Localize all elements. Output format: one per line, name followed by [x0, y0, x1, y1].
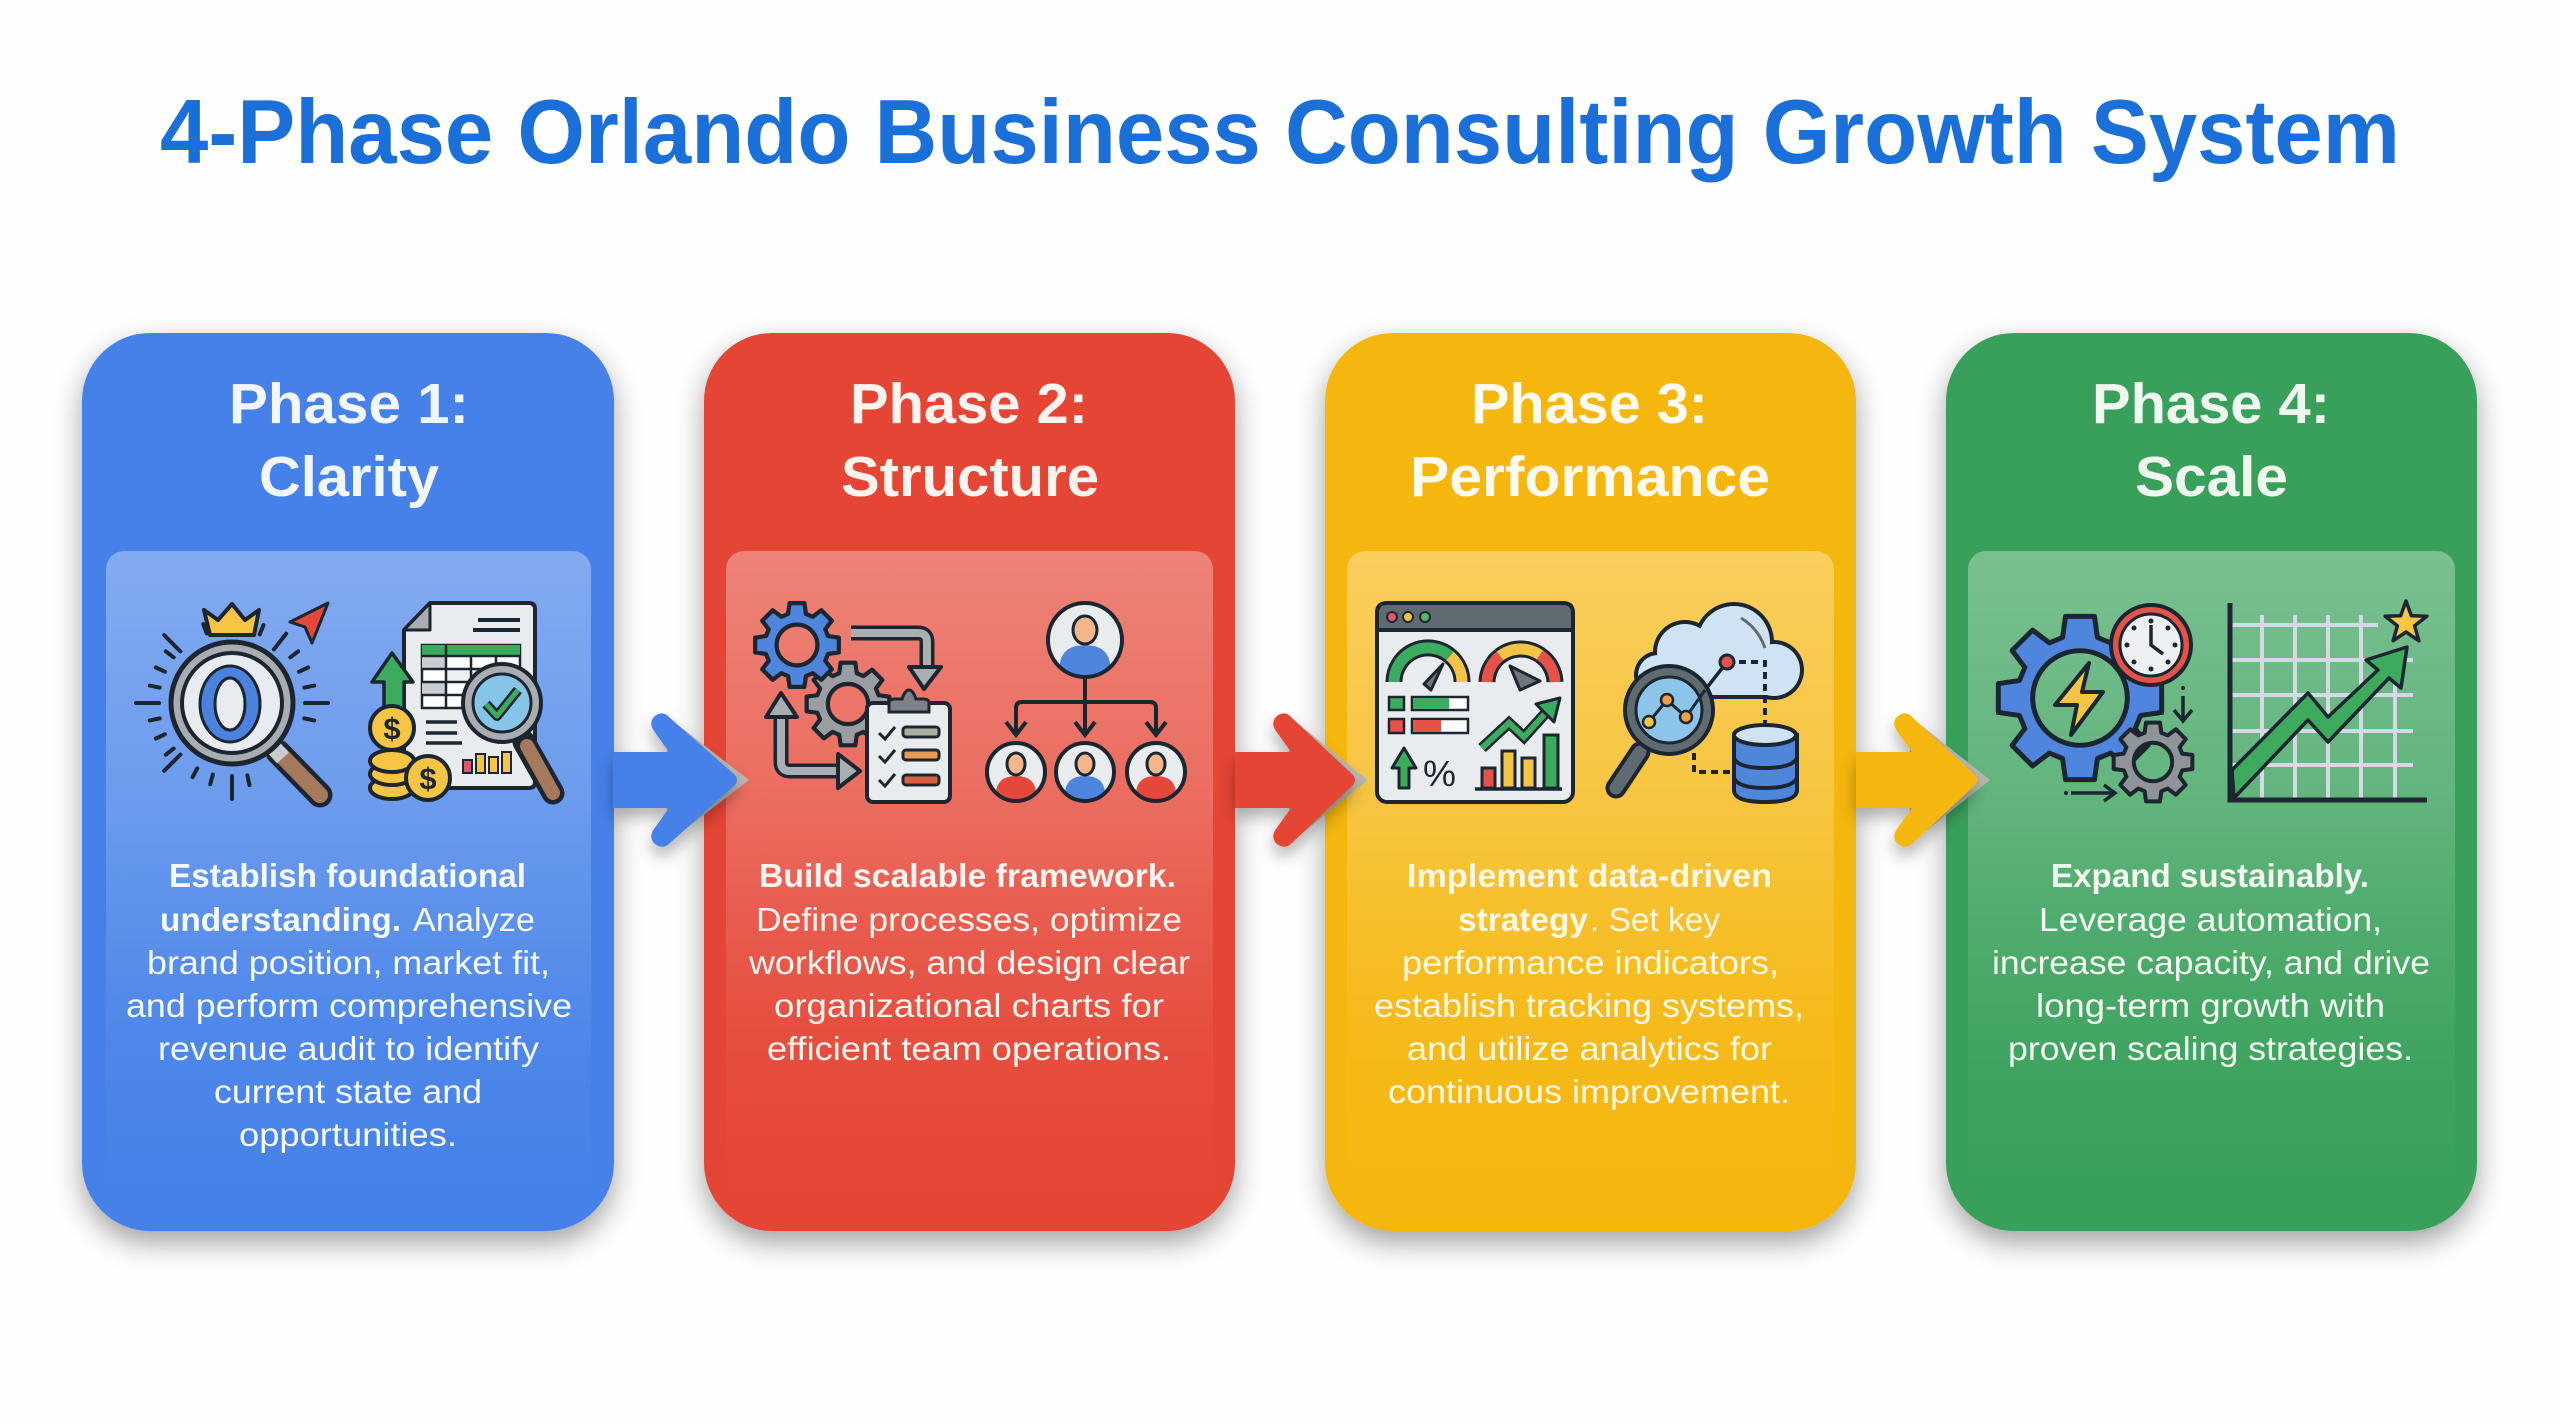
heading: phase 3	[1410, 372, 1770, 509]
text: phase 3 description: and utilize analytics for	[1407, 1031, 1772, 1068]
panel: phase 1 clarity	[82, 333, 614, 1231]
text: phase 1 description	[126, 858, 572, 1154]
text: phase 4 description	[1992, 858, 2430, 1068]
heading: phase 1: Clarity	[259, 445, 439, 509]
icon: organizational chart	[987, 603, 1185, 801]
icon: revenue audit document: $	[419, 761, 437, 796]
text: phase 4 description: Expand sustainably.	[2051, 858, 2369, 895]
text: phase 3 description: establish tracking systems,	[1374, 988, 1804, 1025]
arrow: phase 1 to phase 2	[613, 713, 749, 847]
heading: phase 3: Phase 3:	[1471, 372, 1708, 436]
arrow: phase 2 to phase 3	[1235, 713, 1368, 847]
panel: phase 2 structure	[704, 333, 1235, 1231]
text: phase 1 description: Analyze	[413, 902, 535, 939]
text: phase 2 description: efficient team operations.	[767, 1031, 1171, 1068]
text: phase 2 description: Build scalable framework.	[759, 858, 1176, 895]
text: phase 3 description	[1374, 858, 1804, 1111]
text: phase 4 description: increase capacity, and drive	[1992, 945, 2430, 982]
heading: phase 4: Phase 4:	[2092, 372, 2330, 436]
text: phase 1 description: brand position, market fit,	[147, 945, 550, 982]
icon: cloud data analysis	[1616, 602, 1804, 802]
text: phase 3 description: . Set key	[1590, 902, 1720, 939]
text: phase 1 description: revenue audit to identify	[158, 1031, 539, 1068]
text: phase 4 description: proven scaling strategies.	[2008, 1031, 2413, 1068]
icon: magnifier with brand O, crown and pointer	[136, 603, 328, 799]
text: phase 1 description: Establish foundational	[169, 858, 526, 895]
icon: analytics dashboard: %	[1423, 753, 1456, 794]
text: phase 1 description: current state and	[214, 1074, 482, 1111]
heading: phase 4	[2092, 372, 2330, 509]
inner panel: phase 3	[1347, 551, 1834, 1216]
title: 4-Phase Orlando Business Consulting Growth System	[160, 82, 2400, 183]
inner panel: phase 4	[1968, 551, 2455, 1216]
inner panel: phase 2	[726, 551, 1213, 1216]
icon: revenue audit document: $	[383, 711, 401, 746]
icon: analytics dashboard	[1377, 603, 1573, 802]
heading: phase 3: Performance	[1410, 445, 1770, 509]
heading: phase 4: Scale	[2135, 445, 2288, 509]
text: phase 3 description: continuous improvement.	[1388, 1074, 1790, 1111]
panel: phase 4 scale	[1946, 333, 2477, 1231]
icon: growth chart with star	[2230, 601, 2427, 800]
panel: phase 3 performance	[1325, 333, 1856, 1231]
text: phase 2 description: workflows, and design clear	[748, 945, 1190, 982]
heading: phase 2	[841, 372, 1099, 509]
text: phase 3 description: strategy	[1458, 902, 1588, 939]
text: phase 4 description: Leverage automation,	[2039, 902, 2382, 939]
heading: phase 1: Phase 1:	[229, 372, 469, 436]
text: phase 2 description: organizational charts for	[774, 988, 1164, 1025]
text: phase 3 description: Implement data-driven	[1407, 858, 1772, 895]
text: phase 2 description: Define processes, optimize	[756, 902, 1182, 939]
heading: phase 2: Structure	[841, 445, 1099, 509]
text: phase 2 description	[748, 858, 1190, 1068]
icon: process gears, flow arrows and checklist	[755, 603, 950, 802]
icon: revenue audit document	[370, 603, 553, 800]
heading: phase 1	[229, 372, 469, 509]
text: phase 4 description: long-term growth with	[2036, 988, 2385, 1025]
arrow: phase 3 to phase 4	[1856, 713, 1990, 847]
icon: automation gears and clock	[1998, 605, 2192, 801]
inner panel: phase 1	[106, 551, 591, 1216]
text: phase 1 description: opportunities.	[239, 1117, 457, 1154]
text: phase 1 description: understanding.	[160, 902, 401, 939]
heading: phase 2: Phase 2:	[850, 372, 1088, 436]
text: phase 1 description: and perform comprehensive	[126, 988, 572, 1025]
text: phase 3 description: performance indicators,	[1402, 945, 1779, 982]
